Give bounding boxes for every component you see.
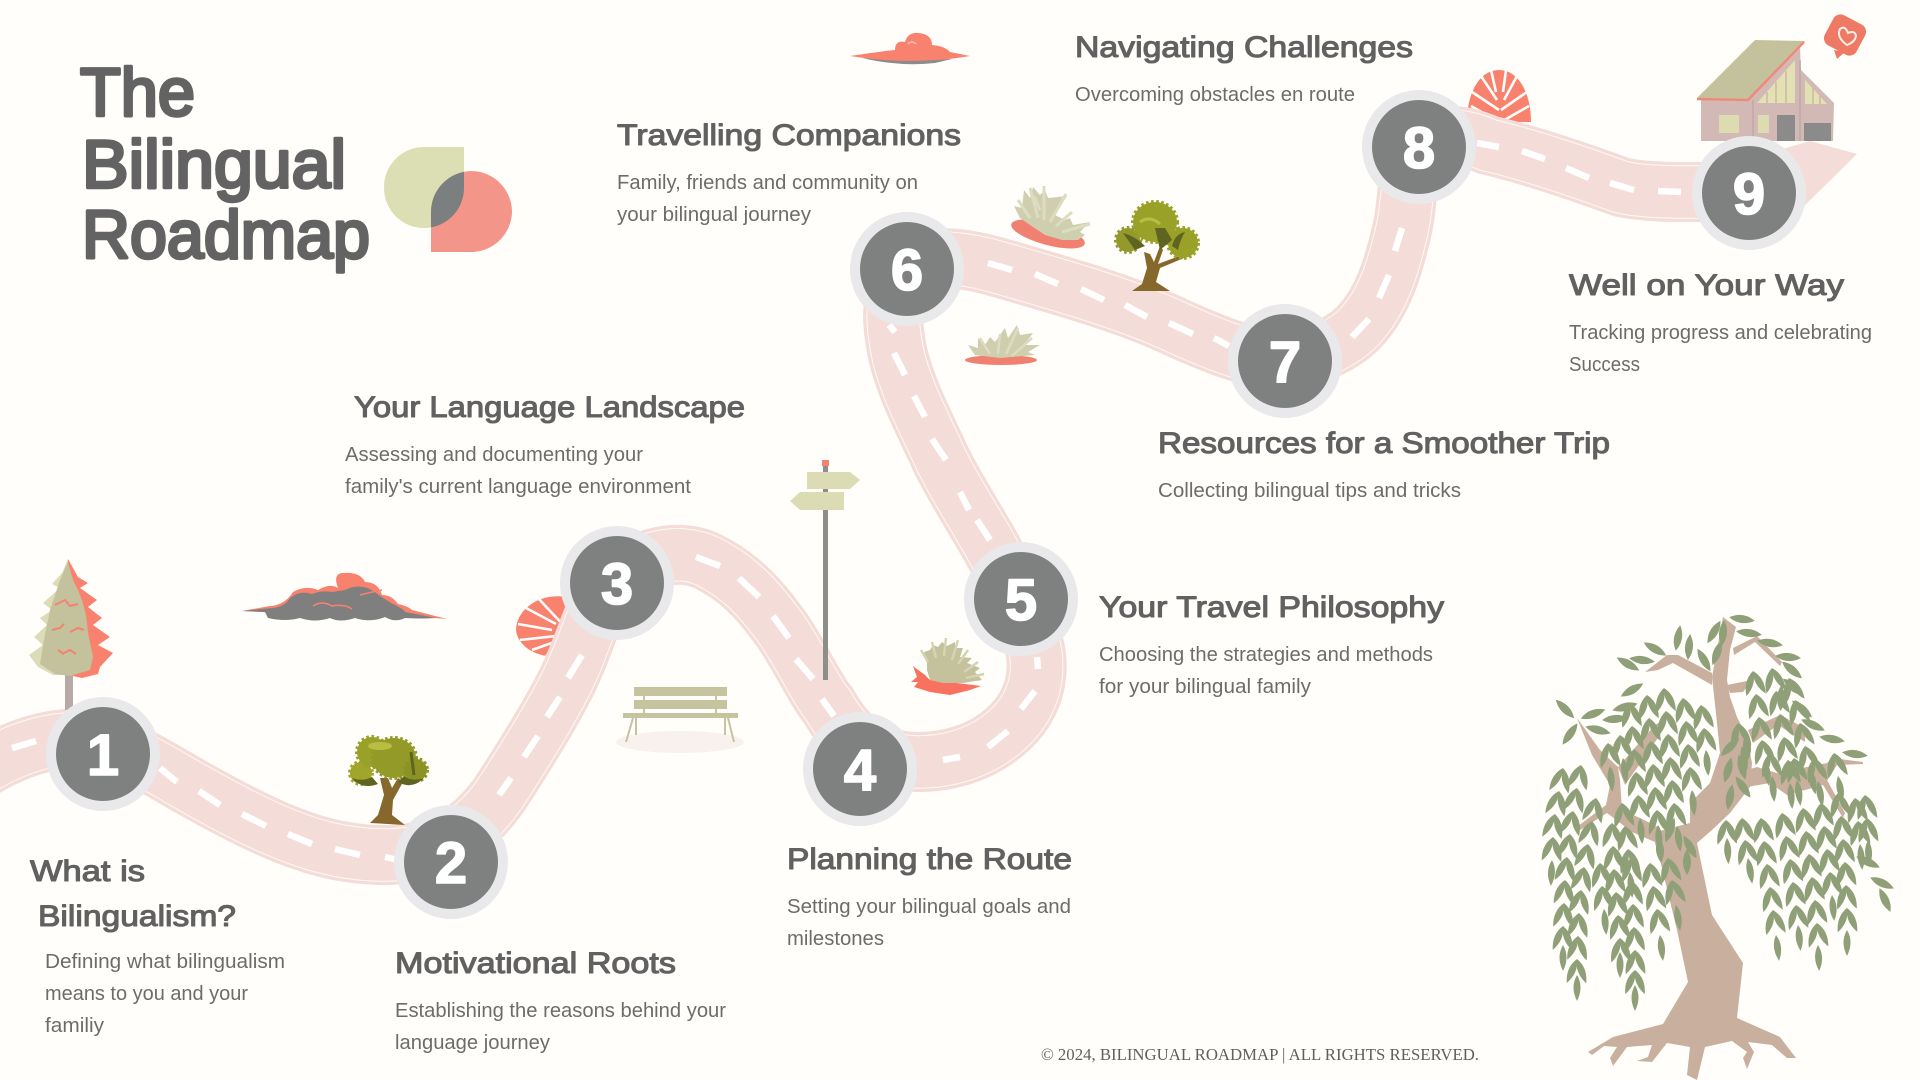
step 1 marker: 1: [87, 723, 119, 788]
text: Planning the Route: Planning the Route: [787, 843, 1072, 876]
logo shapes: [384, 147, 512, 252]
text: Navigating Challenges: Overcoming obstacles en route: [1075, 84, 1355, 106]
step 5 marker: 5: [1005, 568, 1037, 633]
text: Motivational Roots: Motivational Roots: [395, 947, 676, 980]
icon: coral fan plant near step 8: [1467, 70, 1531, 122]
text: Well on Your Way: Tracking progress and celebrating: [1569, 322, 1872, 344]
step 3 marker: 3: [601, 552, 633, 617]
willow loose leaves: [1553, 613, 1895, 913]
icon: signpost: [790, 460, 860, 680]
text: Navigating Challenges: [1075, 31, 1413, 106]
step 5 marker: [964, 542, 1078, 656]
road: [0, 136, 1857, 860]
step 6 marker: 6: [891, 238, 923, 303]
step 1 marker: [46, 697, 160, 811]
text: What is Bilingualism: Defining what bilingualism: [45, 951, 285, 973]
icon: heart speech bubble: [1821, 12, 1869, 59]
text: Well on Your Way: Well on Your Way: [1569, 269, 1844, 302]
icon: coral fan plant near step 3: [516, 596, 572, 656]
icon: willow tree: [1552, 613, 1895, 1080]
icon: shrub near step 4: [911, 638, 984, 695]
step 9 marker: 9: [1733, 162, 1765, 227]
text: Resources for a Smoother Trip: [1158, 427, 1610, 502]
title: The: [80, 54, 195, 130]
text: Motivational Roots: [395, 947, 726, 1054]
text: What is Bilingualism: means to you and your: [45, 983, 248, 1005]
copyright footer: © 2024, BILINGUAL ROADMAP | ALL RIGHTS RESERVED.: [1041, 1045, 1479, 1064]
text: Your Travel Philosophy: Your Travel Philosophy: [1099, 591, 1444, 624]
icon: pine tree: [29, 559, 113, 710]
text: Resources for a Smoother Trip: Resources for a Smoother Trip: [1158, 427, 1610, 460]
icon: bush below road: [965, 325, 1040, 365]
icon: green tree near step 2: [350, 737, 427, 825]
text: Motivational Roots: language journey: [395, 1032, 550, 1054]
text: Travelling Companions: Family, friends and community on: [617, 172, 918, 194]
text: Planning the Route: milestones: [787, 928, 884, 950]
icon: coral cloud: [850, 33, 970, 64]
title: Roadmap: [82, 197, 370, 273]
step 4 marker: 4: [844, 738, 876, 803]
step 6 marker: [850, 212, 964, 326]
text: Travelling Companions: your bilingual journey: [617, 204, 811, 226]
text: Planning the Route: Setting your bilingual goals and: [787, 896, 1071, 918]
willow trunk and roots: [1577, 617, 1863, 1080]
text: What is Bilingualism: [30, 855, 285, 1037]
step 8 marker: 8: [1403, 116, 1435, 181]
willow foliage: [1552, 645, 1868, 985]
step 4 marker: [803, 712, 917, 826]
text: Planning the Route: [787, 843, 1072, 950]
text: Well on Your Way: Success: [1569, 354, 1640, 376]
step 2 marker: [394, 805, 508, 919]
text: What is Bilingualism: familiy: [45, 1015, 104, 1037]
text: Your Travel Philosophy: Choosing the strategies and methods: [1099, 644, 1433, 666]
text: Your Language Landscape: Assessing and documenting your: [345, 444, 643, 466]
title: Bilingual: [82, 126, 346, 202]
text: Your Travel Philosophy: for your bilingual family: [1099, 676, 1311, 698]
text: Travelling Companions: [617, 119, 961, 226]
text: Travelling Companions: Travelling Companions: [617, 119, 961, 152]
text: What is Bilingualism: What is: [30, 855, 145, 888]
icon: green tree near step 6: [1116, 202, 1198, 291]
text: Your Travel Philosophy: [1099, 591, 1444, 698]
icon: dark cloud: [242, 573, 447, 620]
text: Motivational Roots: Establishing the reasons behind your: [395, 1000, 726, 1022]
text: Resources for a Smoother Trip: Collecting bilingual tips and tricks: [1158, 480, 1461, 502]
step 9 marker: [1692, 136, 1806, 250]
icon: house: [1697, 40, 1834, 141]
step 7 marker: [1228, 304, 1342, 418]
step 8 marker: [1362, 90, 1476, 204]
text: Your Language Landscape: [345, 391, 745, 498]
icon: bush near road top: [1008, 186, 1090, 254]
text: Your Language Landscape: family's current language environment: [345, 476, 691, 498]
step 3 marker: [560, 526, 674, 640]
title: [80, 54, 370, 273]
text: What is Bilingualism: Bilingualism?: [38, 900, 236, 933]
text: Your Language Landscape: Your Language Landscape: [354, 391, 745, 424]
step 7 marker: 7: [1269, 330, 1301, 395]
icon: bench: [616, 687, 744, 753]
text: Well on Your Way: [1569, 269, 1872, 376]
step 2 marker: 2: [435, 831, 467, 896]
text: Navigating Challenges: Navigating Challenges: [1075, 31, 1413, 64]
